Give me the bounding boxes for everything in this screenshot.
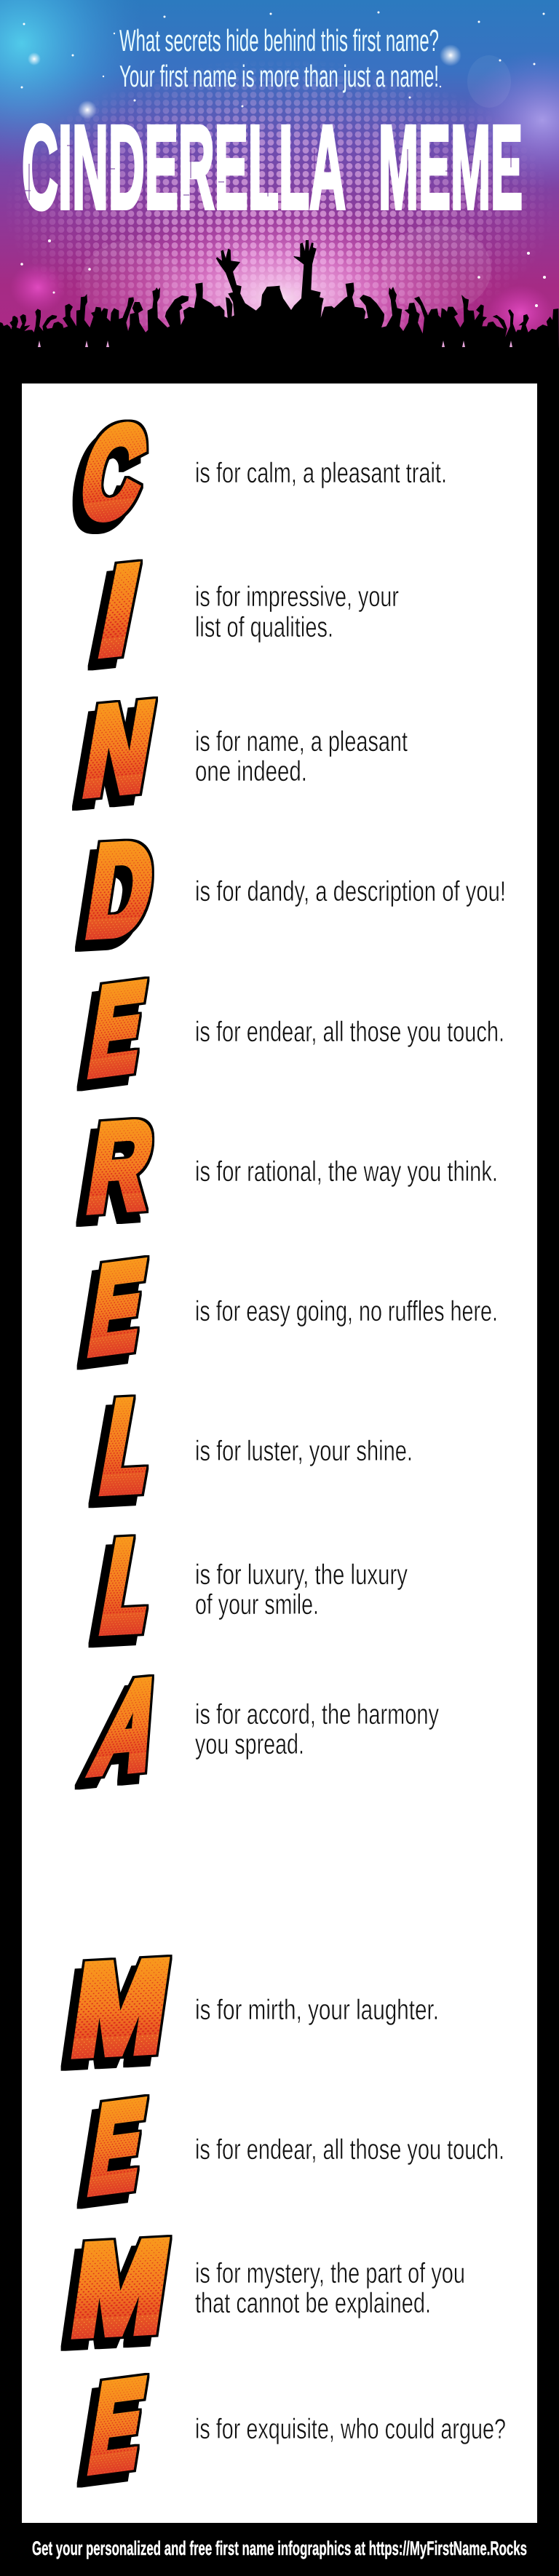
row: M	[65, 1934, 439, 2081]
row: M second	[65, 2214, 465, 2361]
description I: list of qualities.	[195, 612, 333, 643]
stage background	[0, 0, 559, 348]
description L: is for luster, your shine.	[195, 1436, 413, 1467]
letter E: E	[82, 2074, 152, 2219]
panel: letter list	[22, 383, 537, 2523]
description N	[195, 726, 408, 787]
subtitle	[119, 23, 439, 93]
letter E: E	[82, 1235, 152, 1380]
description L: is for luxury, the luxury	[195, 1559, 408, 1591]
description I	[195, 581, 399, 643]
letter M: M	[65, 2214, 176, 2361]
letter N: N	[76, 677, 162, 821]
row: E fourth	[82, 2353, 506, 2497]
letter R: R	[79, 1094, 162, 1239]
panel background	[22, 383, 537, 2523]
row: A	[81, 1652, 439, 1800]
description A	[195, 1699, 439, 1760]
description N: one indeed.	[195, 756, 307, 787]
letter E: E	[82, 2353, 152, 2497]
row: R	[79, 1094, 498, 1239]
row: I	[91, 539, 399, 680]
description N: is for name, a pleasant	[195, 726, 408, 758]
description M: is for mirth, your laughter.	[195, 1995, 439, 2026]
letter E: E	[82, 956, 152, 1101]
row: E	[82, 956, 504, 1101]
description I: is for impressive, your	[195, 581, 399, 613]
letter I: I	[91, 539, 148, 680]
row: D	[79, 816, 506, 962]
crowd silhouette	[0, 240, 559, 383]
description A: you spread.	[195, 1729, 304, 1760]
header banner	[0, 0, 559, 348]
letter C: C	[71, 399, 155, 547]
row: L	[95, 1375, 413, 1516]
description C: is for calm, a pleasant trait.	[195, 458, 447, 489]
description L: of your smile.	[195, 1589, 319, 1621]
description A: is for accord, the harmony	[195, 1699, 439, 1730]
row: L second	[95, 1515, 408, 1656]
description M: that cannot be explained.	[195, 2288, 431, 2319]
description M	[195, 2258, 465, 2319]
row: C	[71, 399, 447, 547]
letter A: A	[81, 1652, 178, 1800]
letter L: L	[95, 1375, 161, 1516]
sparkles	[20, 12, 546, 307]
letter D: D	[79, 816, 162, 962]
row: E second	[82, 1235, 498, 1380]
letter M: M	[65, 1934, 176, 2081]
row: N	[76, 677, 408, 821]
row: E third	[82, 2074, 504, 2219]
letter L: L	[95, 1515, 161, 1656]
description M: is for mystery, the part of you	[195, 2258, 465, 2289]
description L	[195, 1559, 408, 1621]
